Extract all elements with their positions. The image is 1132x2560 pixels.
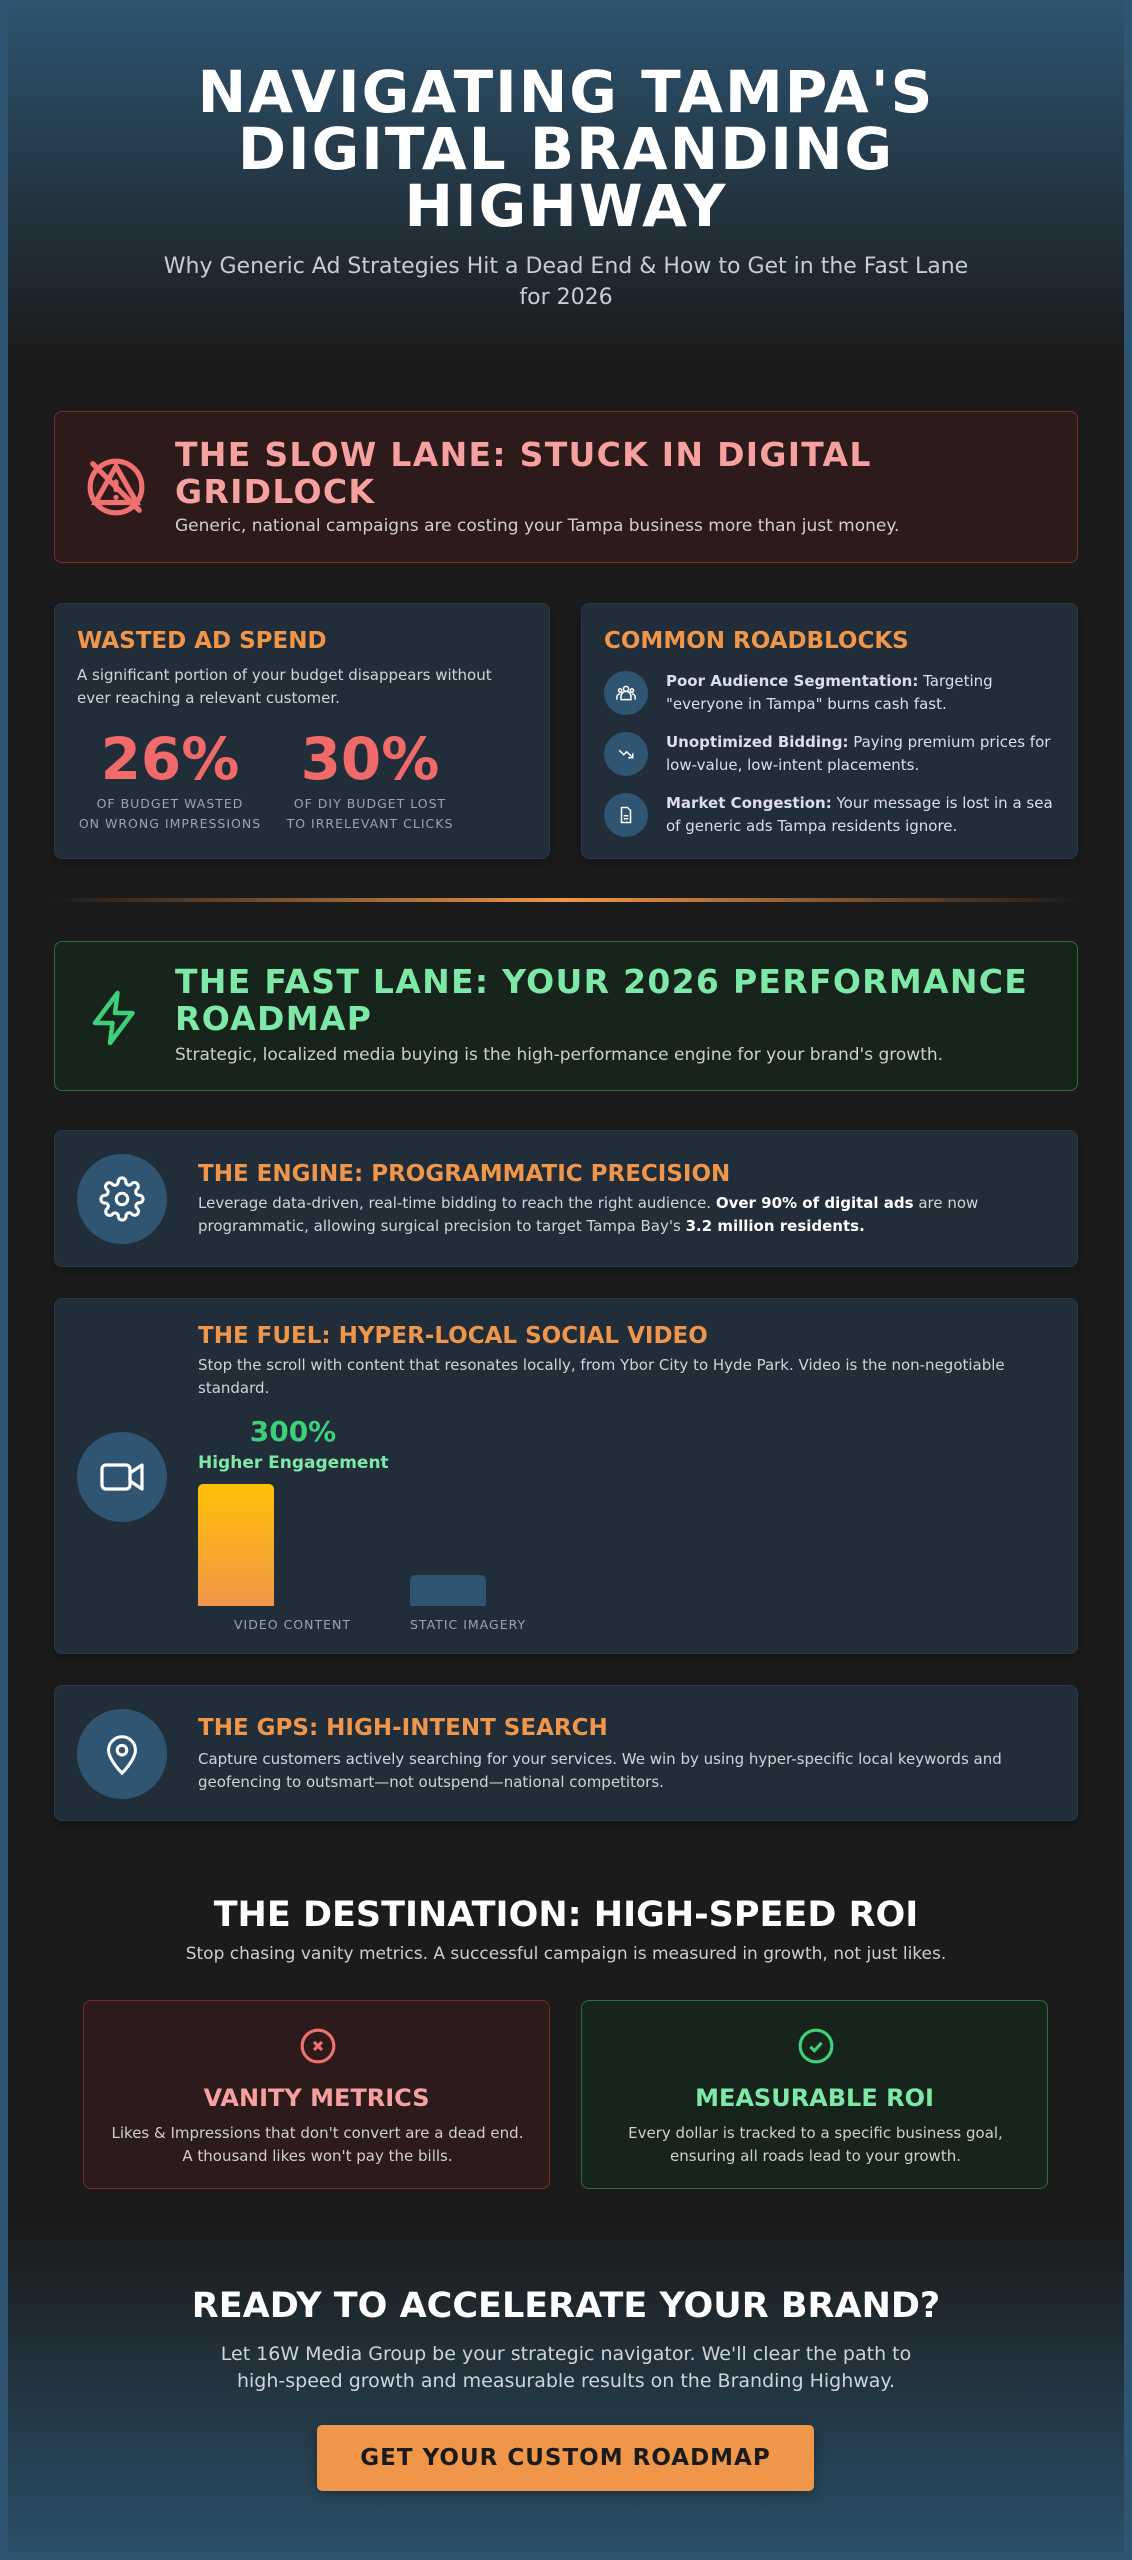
- icon: blocked warning: [88, 458, 144, 516]
- button: cta: [317, 2425, 814, 2491]
- bar: video: [198, 1484, 274, 1606]
- text: Strategic, localized media buying is the high-performance engine for your brand's growth.: [175, 1045, 943, 1065]
- stat: 26%: OF BUDGET WASTED: [97, 796, 243, 811]
- icon: x circle: [300, 2028, 336, 2064]
- subtitle: Why Generic Ad Strategies Hit a Dead End & How to Get in the Fast Lane for 2026: [164, 254, 968, 310]
- label: static imagery: STATIC IMAGERY: [410, 1617, 526, 1632]
- text: Likes & Impressions that don't convert are a dead end.: [112, 2124, 523, 2142]
- icon: gear: [77, 1154, 167, 1244]
- title: [198, 58, 934, 240]
- text: A significant portion of your budget disappears without ever reaching a relevant customer.: [77, 666, 492, 707]
- title: NAVIGATING TAMPA'S: [198, 58, 934, 126]
- stat: 30%: OF DIY BUDGET LOST: [294, 796, 446, 811]
- heading: slow lane: THE SLOW LANE: STUCK IN DIGITAL GRIDLOCK: [175, 435, 872, 511]
- stat: 30%: [286, 725, 453, 831]
- heading: COMMON ROADBLOCKS: [604, 628, 909, 654]
- label: video content: VIDEO CONTENT: [234, 1617, 351, 1632]
- bar: static: [410, 1575, 486, 1606]
- button: cta: GET YOUR CUSTOM ROADMAP: [360, 2445, 771, 2471]
- panel: fast lane banner: [54, 941, 1078, 1091]
- text: Leverage data-driven, real-time bidding to reach the right audience. Over 90% of digital ads are now programmatic, allowing surgical precision to target Tampa Bay's 3.2 million residents.: [198, 1194, 978, 1235]
- text: Every dollar is tracked to a specific business goal, ensuring all roads lead to your growth.: [628, 2124, 1003, 2165]
- text: Capture customers actively searching for your services. We win by using hyper-specific local keywords and geofencing to outsmart—not outspend—national competitors.: [198, 1750, 1002, 1791]
- text: cta: Let 16W Media Group be your strategic navigator. We'll clear the path to high-speed growth and measurable results on the Branding Highway.: [221, 2343, 911, 2392]
- heading: MEASURABLE ROI: [695, 2084, 934, 2112]
- panel: fuel: [54, 1298, 1078, 1654]
- item: segmentation: Poor Audience Segmentation: Targeting "everyone in Tampa" burns cash fast.: [666, 672, 993, 713]
- item: congestion: Market Congestion: Your message is lost in a sea of generic ads Tampa residents ignore.: [666, 794, 1053, 835]
- heading: WASTED AD SPEND: [77, 628, 327, 654]
- title: HIGHWAY: [404, 172, 727, 240]
- text: slow lane sub: Generic, national campaigns are costing your Tampa business more than just money.: [175, 516, 899, 536]
- heading: VANITY METRICS: [203, 2084, 430, 2112]
- icon: map pin: [77, 1709, 167, 1799]
- stat: 26%: [79, 725, 261, 831]
- heading: THE ENGINE: PROGRAMMATIC PRECISION: [198, 1161, 730, 1187]
- icon: lightning: [92, 990, 135, 1046]
- heading: fast lane: THE FAST LANE: YOUR 2026 PERFORMANCE ROADMAP: [175, 962, 1028, 1038]
- stat: 26%: ON WRONG IMPRESSIONS: [79, 816, 261, 831]
- panel: measurable roi: [581, 2000, 1048, 2189]
- item: bidding: Unoptimized Bidding: Paying premium prices for low-value, low-intent placements.: [666, 733, 1050, 774]
- title: DIGITAL BRANDING: [238, 115, 894, 183]
- text: A thousand likes won't pay the bills.: [182, 2147, 453, 2165]
- text: destination sub: Stop chasing vanity metrics. A successful campaign is measured in growth, not just likes.: [186, 1944, 946, 1964]
- stat: 300%: 300%: [250, 1415, 336, 1448]
- icon: check circle: [798, 2028, 834, 2064]
- label: higher engagement: Higher Engagement: [198, 1453, 389, 1473]
- panel: common roadblocks: [581, 603, 1078, 859]
- panel: engine: [54, 1130, 1078, 1267]
- stat: 26%: 26%: [101, 725, 239, 793]
- panel: wasted ad spend: [54, 603, 550, 859]
- bar chart: [198, 1415, 526, 1632]
- heading: THE GPS: HIGH-INTENT SEARCH: [198, 1715, 608, 1741]
- icon: video: [77, 1432, 167, 1522]
- panel: vanity metrics: [83, 2000, 550, 2189]
- heading: THE FUEL: HYPER-LOCAL SOCIAL VIDEO: [198, 1323, 708, 1349]
- panel: gps: [54, 1685, 1078, 1821]
- text: [112, 2124, 523, 2165]
- stat: 30%: TO IRRELEVANT CLICKS: [287, 816, 453, 831]
- stat: 30%: 30%: [301, 725, 439, 793]
- text: Stop the scroll with content that resonates locally, from Ybor City to Hyde Park. Video is the non-negotiable standard.: [198, 1356, 1005, 1397]
- heading: cta: READY TO ACCELERATE YOUR BRAND?: [192, 2286, 940, 2326]
- panel: slow lane banner: [54, 411, 1078, 563]
- heading: destination: THE DESTINATION: HIGH-SPEED ROI: [214, 1895, 918, 1935]
